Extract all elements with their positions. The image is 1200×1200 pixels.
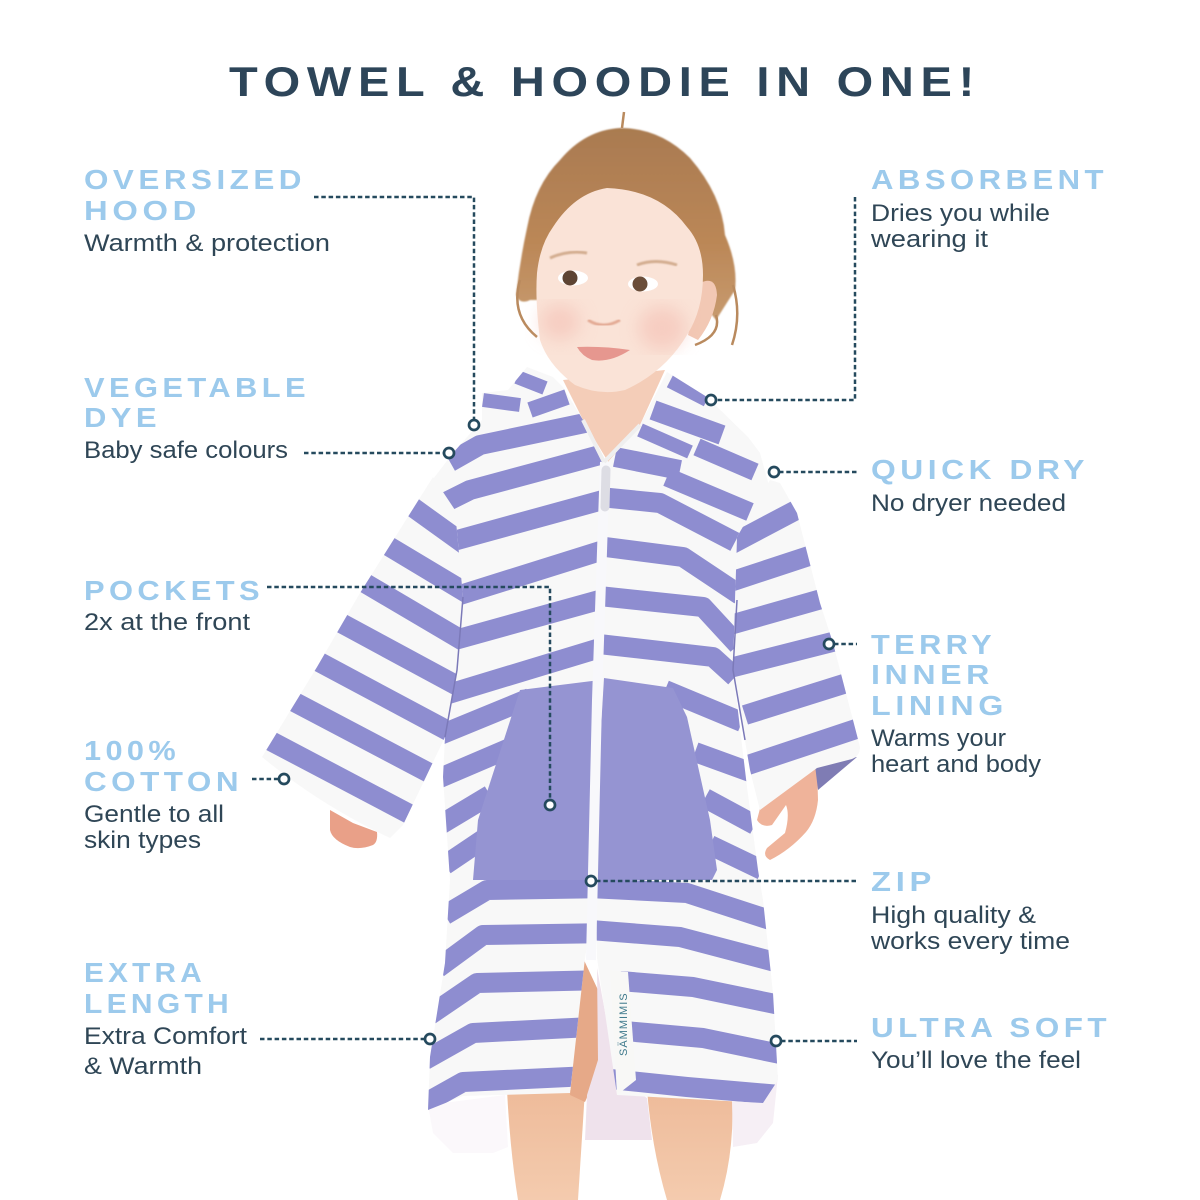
callout: terry inner lining — [824, 629, 1041, 778]
description: No dryer needed — [871, 490, 1066, 517]
marker — [545, 800, 555, 810]
description — [84, 801, 224, 854]
heading: ZIP — [871, 866, 936, 897]
marker — [771, 1036, 781, 1046]
marker — [444, 448, 454, 458]
heading: HOOD — [84, 195, 201, 226]
leader line — [716, 197, 855, 400]
description — [870, 902, 1070, 955]
heading: OVERSIZED — [84, 164, 306, 195]
leader line — [314, 197, 474, 420]
neck — [563, 370, 665, 465]
right hand — [757, 765, 818, 860]
heading: INNER — [871, 659, 994, 690]
mouth — [577, 347, 630, 361]
marker — [586, 876, 596, 886]
description — [871, 725, 1041, 778]
description: Extra Comfort — [84, 1023, 247, 1050]
callout: vegetable dye — [84, 372, 454, 464]
heading: LENGTH — [84, 988, 233, 1019]
marker — [824, 639, 834, 649]
heading: ULTRA SOFT — [871, 1012, 1111, 1043]
sleeve lining — [815, 757, 857, 790]
description: High quality & — [871, 902, 1036, 929]
callout: extra length — [84, 957, 435, 1080]
left sleeve — [266, 492, 464, 822]
face — [536, 188, 703, 392]
leader line — [781, 1040, 857, 1042]
zip pull — [605, 470, 606, 507]
marker — [469, 420, 479, 430]
body left — [428, 367, 607, 1110]
title: TOWEL & HOODIE IN ONE! — [229, 58, 981, 105]
description: works every time — [870, 928, 1070, 955]
heading — [84, 164, 306, 226]
heading: DYE — [84, 402, 161, 433]
right sleeve — [732, 502, 858, 810]
heading — [84, 735, 243, 797]
illustration: child wearing striped hooded towel — [262, 112, 865, 1200]
heading — [871, 629, 1008, 721]
description: Baby safe colours — [84, 437, 288, 464]
leader line — [596, 880, 857, 882]
leader line — [267, 587, 550, 800]
leader line — [252, 778, 279, 780]
zip — [591, 462, 605, 960]
garment label — [610, 970, 636, 1095]
description: You’ll love the feel — [871, 1047, 1081, 1074]
leader line — [779, 471, 857, 473]
heading: 100% — [84, 735, 180, 766]
heading: ABSORBENT — [871, 164, 1108, 195]
legs — [507, 1090, 732, 1200]
brows — [550, 252, 677, 265]
description: wearing it — [870, 226, 988, 253]
leader line — [304, 452, 444, 454]
heading: VEGETABLE — [84, 372, 310, 403]
callout: zip — [586, 866, 1070, 955]
description: 2x at the front — [84, 609, 250, 636]
heading: QUICK DRY — [871, 454, 1089, 485]
callout: ultra soft — [771, 1012, 1111, 1074]
description: Dries you while — [871, 200, 1050, 227]
marker — [279, 774, 289, 784]
description: & Warmth — [84, 1053, 202, 1080]
description — [870, 200, 1050, 253]
heading — [84, 372, 310, 433]
heading: TERRY — [871, 629, 996, 660]
heading: COTTON — [84, 766, 243, 797]
inner lining — [428, 968, 778, 1153]
hair — [516, 112, 737, 345]
callout: 100% cotton — [84, 735, 289, 854]
description — [84, 1023, 247, 1080]
leader line — [260, 1038, 425, 1040]
cheeks — [540, 304, 686, 350]
description: Gentle to all — [84, 801, 224, 828]
nose — [588, 320, 620, 325]
marker — [425, 1034, 435, 1044]
description: skin types — [84, 827, 201, 854]
heading — [84, 957, 233, 1019]
leader line — [834, 643, 857, 645]
description: Warmth & protection — [84, 230, 330, 257]
callout: quick dry — [769, 454, 1089, 517]
ear — [688, 281, 717, 340]
marker — [769, 467, 779, 477]
inner thigh seen through slit — [570, 958, 598, 1102]
heading: LINING — [871, 690, 1008, 721]
left hand — [330, 810, 377, 848]
heading: EXTRA — [84, 957, 206, 988]
collar zipper edges — [583, 420, 640, 462]
description: Warms your — [871, 725, 1006, 752]
callout: absorbent — [706, 164, 1108, 405]
eyes — [558, 270, 658, 292]
pockets — [473, 678, 717, 880]
callout: pockets — [84, 575, 555, 810]
description: heart and body — [871, 751, 1041, 778]
callout: oversized hood — [84, 164, 479, 430]
heading: POCKETS — [84, 575, 264, 606]
garment label: SÄMMIMIS — [618, 992, 630, 1056]
marker — [706, 395, 716, 405]
body right — [596, 372, 778, 1103]
